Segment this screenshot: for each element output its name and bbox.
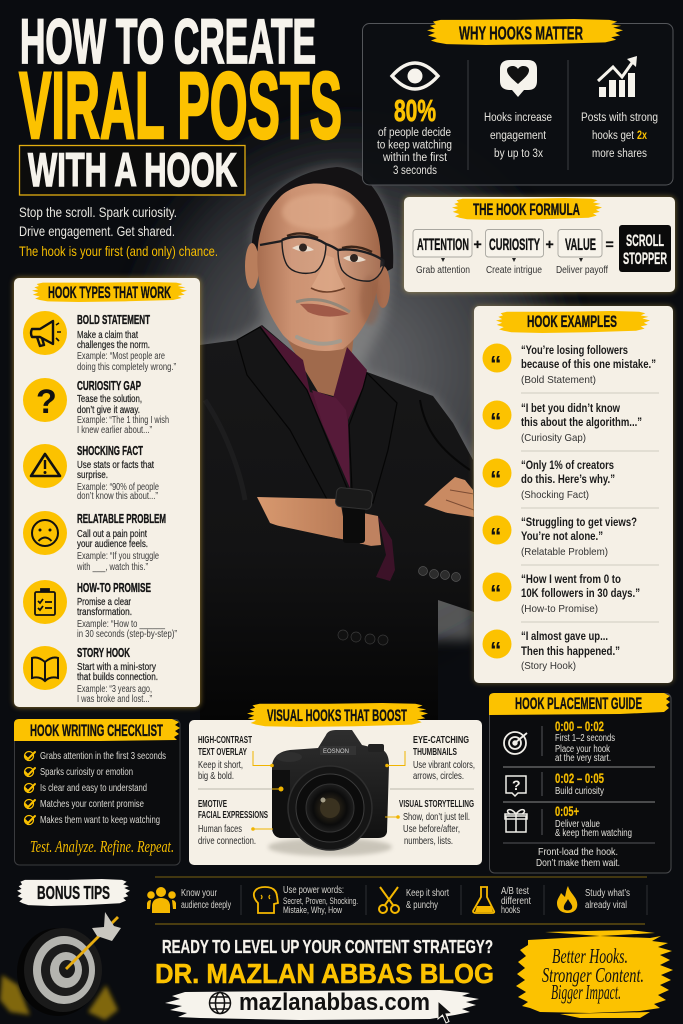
callout: emotive facial expressions: Human faces <box>198 823 242 835</box>
callout: emotive facial expressions <box>198 798 268 847</box>
panel: hook writing checklist <box>14 719 180 865</box>
text: engagement <box>484 112 552 160</box>
hook type: story hook: I was broke and lost...” <box>77 694 152 705</box>
buttons <box>418 566 460 582</box>
call to action: DR. MAZLAN ABBAS BLOG <box>155 958 494 989</box>
callout: eye-catching thumbnails: arrows, circles. <box>413 770 464 782</box>
step: deliver value: Deliver value <box>555 819 600 830</box>
portrait photo: man with glasses and arms crossed <box>200 167 474 720</box>
callout: emotive facial expressions: drive connection. <box>198 835 256 847</box>
formula terms: + <box>546 236 554 252</box>
tip: study viral <box>557 886 630 913</box>
step: first two seconds: First 1–2 seconds <box>555 733 615 744</box>
hook type: curiosity gap: Example: “The 1 thing I wish <box>77 415 169 426</box>
intro text: Drive engagement. Get shared. <box>19 223 175 239</box>
formula captions: Create intrigue <box>486 265 542 276</box>
tip: know your audience: Know your <box>181 888 218 899</box>
icon: question bubble <box>506 776 526 796</box>
goatee <box>297 337 340 344</box>
icon: open book <box>32 658 58 681</box>
hook type: bold statement: Make a claim that <box>77 330 138 341</box>
step: build curiosity: Build curiosity <box>555 786 604 797</box>
hook type: bold statement: doing this completely wrong.” <box>77 362 176 373</box>
intro text: The hook is your first (and only) chance. <box>19 243 218 259</box>
bonus tips strip <box>17 877 647 924</box>
stat: 80 percent: within the first <box>382 152 448 164</box>
formula terms: + <box>474 236 482 252</box>
checklist items: Makes them want to keep watching <box>40 814 160 826</box>
icon: sad face <box>32 520 58 546</box>
formula terms: CURIOSITY <box>489 235 540 254</box>
callout: high-contrast text overlay: big & bold. <box>198 770 234 782</box>
example: shocking fact: “ <box>490 466 502 492</box>
tip: keep it short: & punchy <box>406 900 438 911</box>
formula terms: VALUE <box>565 235 596 254</box>
glasses <box>260 237 384 281</box>
icon: growth chart <box>598 56 637 97</box>
step: deliver value: 0:05+ <box>555 803 579 819</box>
tip: keep it short <box>379 887 449 913</box>
example: curiosity gap: “I bet you didn’t know <box>521 403 620 415</box>
callout: visual storytelling: Use before/after, <box>403 823 460 835</box>
right hand fingers <box>424 477 474 524</box>
text: engagement: engagement <box>490 130 547 142</box>
icon: megaphone <box>31 321 61 346</box>
hook type: shocking fact: Use stats or facts that <box>77 460 154 471</box>
icon: gift box <box>505 810 527 832</box>
panel: hook types that work <box>14 278 200 707</box>
icon: dartboard with dart <box>0 912 121 1020</box>
bonus tips heading <box>17 879 130 906</box>
placement note: Don’t make them wait. <box>536 857 620 869</box>
hook type: curiosity gap: Tease the solution, <box>77 394 142 405</box>
checklist items <box>40 750 166 826</box>
checklist ticks <box>24 752 35 824</box>
example: bold statement: “ <box>490 351 502 377</box>
checklist items: Matches your content promise <box>40 798 144 810</box>
face <box>257 184 381 351</box>
icon: cursor <box>438 1001 452 1023</box>
watch <box>343 505 365 543</box>
icon: flame <box>557 886 577 913</box>
tip: power words <box>254 885 358 915</box>
panel: hook writing checklist: HOOK WRITING CHECKLIST <box>30 721 163 740</box>
title <box>19 7 342 196</box>
example: how-to promise: 10K followers in 30 days.” <box>521 588 640 600</box>
step: first two seconds: at the very start. <box>555 753 611 764</box>
hook type: bold statement <box>23 311 176 373</box>
icon: target <box>504 732 527 754</box>
website link: mazlanabbas.com <box>239 989 430 1016</box>
photo: dslr camera: EOSNON <box>323 749 349 755</box>
step: deliver value <box>555 803 632 839</box>
hook type: curiosity gap: don’t give it away. <box>77 405 140 416</box>
checklist slogan: Test. Analyze. Refine. Repeat. <box>30 837 174 856</box>
forehead light <box>282 194 354 230</box>
jacket <box>200 325 474 720</box>
hook type: shocking fact: don’t know this about...” <box>77 491 158 502</box>
hook type: how-to promise: HOW-TO PROMISE <box>77 580 151 595</box>
hook type: relatable problem: RELATABLE PROBLEM <box>77 511 166 526</box>
callout: eye-catching thumbnails: EYE-CATCHING <box>413 734 469 746</box>
example: bold statement: (Bold Statement) <box>521 374 596 386</box>
example: relatable problem: (Relatable Problem) <box>521 546 608 558</box>
tip: keep it short: Keep it short <box>406 888 449 899</box>
tip: study viral: Study what’s <box>585 888 630 899</box>
callout: yellow brush slogan: Bigger Impact. <box>551 980 621 1004</box>
example: how-to promise: “ <box>490 580 502 606</box>
tip: know your audience <box>147 887 231 913</box>
example: how-to promise: (How-to Promise) <box>521 603 598 615</box>
step: first two seconds: 0:00 – 0:02 <box>555 718 604 734</box>
text: shares: hooks get <box>592 130 635 142</box>
hook type: bold statement: Example: “Most people are <box>77 351 165 362</box>
example: shocking fact: (Shocking Fact) <box>521 489 589 501</box>
formula terms: = <box>606 236 614 252</box>
sleeve folds <box>205 400 245 500</box>
tip: know your audience: audience deeply <box>181 900 231 911</box>
panel: hook types that work: HOOK TYPES THAT WORK <box>48 283 171 302</box>
hook type: relatable problem: with ___, watch this.” <box>76 562 148 573</box>
with a hook box <box>20 143 245 196</box>
shirt <box>260 325 367 488</box>
icon: clipboard <box>35 589 55 615</box>
example: bold statement <box>482 344 656 386</box>
hook type: bold statement: BOLD STATEMENT <box>77 312 150 327</box>
example: curiosity gap: (Curiosity Gap) <box>521 432 586 444</box>
stat: 80 percent: of people decide <box>378 127 451 139</box>
callout: visual storytelling: Show, don’t just tell. <box>403 811 470 823</box>
icon: head <box>254 887 278 913</box>
example: relatable problem: “ <box>490 523 502 549</box>
call to action: READY TO LEVEL UP YOUR CONTENT STRATEGY? <box>162 936 493 957</box>
with a hook box: WITH A HOOK <box>28 143 237 196</box>
tip: power words: Use power words: <box>283 885 344 896</box>
lapels <box>237 327 347 505</box>
text: shares: 2x <box>637 130 647 142</box>
icon: globe <box>210 992 230 1014</box>
panel: hook examples <box>474 306 673 683</box>
hook type: shocking fact: Example: “90% of people <box>77 482 159 493</box>
tip: study viral: already viral <box>585 900 627 911</box>
hook type: story hook: that builds connection. <box>77 672 158 683</box>
checklist items: Is clear and easy to understand <box>40 782 147 794</box>
hook type: bold statement: challenges the norm. <box>77 340 150 351</box>
icon: question mark: ? <box>36 383 57 421</box>
hook type: shocking fact <box>23 443 159 502</box>
callout: high-contrast text overlay: Keep it short, <box>198 759 243 771</box>
hook type: how-to promise: in 30 seconds (step-by-step)” <box>77 629 177 640</box>
hook type: how-to promise: Example: “How to ______ <box>77 619 165 630</box>
call to action <box>155 936 494 1023</box>
example: relatable problem <box>482 516 637 558</box>
hair <box>252 167 393 275</box>
text: shares: more shares <box>592 148 647 160</box>
nose <box>311 255 345 292</box>
example: story hook <box>482 630 620 672</box>
panel: hook formula: THE HOOK FORMULA <box>473 200 580 219</box>
icon: heart bubble <box>500 60 537 97</box>
formula captions: Grab attention <box>416 265 470 276</box>
example: bold statement: “You’re losing followers <box>521 345 628 357</box>
photo: dslr camera <box>268 730 392 856</box>
example: shocking fact: “Only 1% of creators <box>521 460 614 472</box>
formula captions <box>416 265 608 276</box>
example: curiosity gap: “ <box>490 408 502 434</box>
example: relatable problem: “Struggling to get views? <box>521 517 637 529</box>
left forearm <box>257 497 347 540</box>
callout: high-contrast text overlay: HIGH-CONTRAST <box>198 734 252 746</box>
text: engagement: by up to 3x <box>494 148 543 160</box>
step: deliver value: & keep them watching <box>555 828 632 839</box>
tip: a/b test: A/B test <box>501 886 529 897</box>
hook type: story hook: Example: “3 years ago, <box>77 684 152 695</box>
hook type: curiosity gap <box>23 378 169 436</box>
callout: visual storytelling <box>399 798 474 847</box>
example: story hook: (Story Hook) <box>521 660 576 672</box>
neck <box>282 325 355 397</box>
hook type: shocking fact: SHOCKING FACT <box>77 443 143 458</box>
formula captions: Deliver payoff <box>556 265 608 276</box>
callout: yellow brush slogan: Better Hooks. <box>552 944 628 968</box>
hook type: story hook: Start with a mini-story <box>77 662 156 673</box>
hook type: relatable problem: your audience feels. <box>77 539 148 550</box>
example: relatable problem: You’re not alone.” <box>521 531 603 543</box>
callout leader lines <box>251 751 405 831</box>
callout: yellow brush slogan <box>516 930 673 1018</box>
step: first two seconds <box>555 718 615 764</box>
example: how-to promise <box>482 572 640 615</box>
hook type: curiosity gap: I knew earlier about...” <box>77 425 152 436</box>
icon: warning triangle <box>31 454 60 476</box>
title: VIRAL POSTS <box>19 53 342 159</box>
callout: high-contrast text overlay: TEXT OVERLAY <box>198 746 247 758</box>
icon: flask <box>473 887 494 913</box>
intro text <box>19 204 218 259</box>
eyes <box>292 245 314 252</box>
hook type: how-to promise: transformation. <box>77 607 132 618</box>
website link <box>165 989 479 1023</box>
panel: hook formula <box>404 197 675 292</box>
tip: a/b test: different <box>501 896 531 907</box>
example: story hook: Then this happened.” <box>521 646 620 658</box>
step: build curiosity: 0:02 – 0:05 <box>555 770 604 786</box>
panel: visual hooks that boost <box>189 703 482 865</box>
hook type: shocking fact: surprise. <box>77 470 108 481</box>
icon: question bubble: ? <box>512 777 521 793</box>
stat: 80 percent: 3 seconds <box>393 165 437 177</box>
example: how-to promise: “How I went from 0 to <box>521 574 621 586</box>
callout: visual storytelling: VISUAL STORYTELLING <box>399 798 474 810</box>
tip: power words: Mistake, Why, How <box>283 905 342 915</box>
example: story hook: “ <box>490 637 502 663</box>
hook type: story hook: STORY HOOK <box>77 645 130 660</box>
placement note <box>536 846 620 869</box>
formula terms: ATTENTION <box>417 235 469 254</box>
tip: power words: Secret, Proven, Shocking. <box>283 896 358 906</box>
icon: eye <box>392 63 438 89</box>
example: shocking fact: do this. Here’s why.” <box>521 474 615 486</box>
text: engagement: Hooks increase <box>484 112 552 124</box>
stat: 80 percent <box>377 93 452 177</box>
hook type: curiosity gap: CURIOSITY GAP <box>77 378 141 393</box>
stat: 80 percent: to keep watching <box>377 140 452 152</box>
hook type: how-to promise <box>23 580 177 640</box>
example: story hook: “I almost gave up... <box>521 631 608 643</box>
callout: eye-catching thumbnails <box>413 734 475 782</box>
hook type: how-to promise: Promise a clear <box>77 597 132 608</box>
hook type: relatable problem <box>23 511 166 573</box>
checklist items: Sparks curiosity or emotion <box>40 766 133 778</box>
text: shares <box>581 112 658 160</box>
text: shares: Posts with strong <box>581 112 658 124</box>
checklist items: Grabs attention in the first 3 seconds <box>40 750 166 762</box>
ears <box>245 243 259 289</box>
bonus tips heading: BONUS TIPS <box>37 883 110 903</box>
formula terms <box>417 235 614 262</box>
stat: 80 percent: 80% <box>394 93 436 128</box>
placement note: Front-load the hook. <box>538 846 618 858</box>
callout: emotive facial expressions: EMOTIVE <box>198 798 227 810</box>
callout: eye-catching thumbnails: THUMBNAILS <box>413 746 457 758</box>
moustache and mouth <box>296 300 350 312</box>
callout: visual storytelling: numbers, lists. <box>404 835 453 847</box>
scroll stopper box <box>619 225 671 272</box>
title: HOW TO CREATE <box>20 7 316 77</box>
tip: a/b test: hooks <box>501 905 520 916</box>
callout: high-contrast text overlay <box>198 734 252 782</box>
icon: scissors <box>379 887 399 913</box>
callout: eye-catching thumbnails: Use vibrant colors, <box>413 759 475 771</box>
example: curiosity gap <box>482 400 642 444</box>
panel: why hooks matter <box>362 19 673 185</box>
sleeves <box>376 502 474 612</box>
cuff <box>376 516 395 581</box>
panel: hook placement guide <box>489 693 671 873</box>
callout: emotive facial expressions: FACIAL EXPRESSIONS <box>198 809 268 821</box>
tip: a/b test <box>473 886 531 916</box>
panel: why hooks matter: WHY HOOKS MATTER <box>459 24 583 44</box>
example: curiosity gap: this about the algorithm...” <box>521 417 642 429</box>
halo <box>200 167 474 640</box>
icon: people <box>147 887 176 913</box>
panel: hook examples: HOOK EXAMPLES <box>527 312 617 331</box>
hook type: story hook <box>23 645 158 705</box>
example: bold statement: because of this one mistake.” <box>521 359 656 371</box>
hook type: relatable problem: Call out a pain point <box>77 529 147 540</box>
step: first two seconds: Place your hook <box>555 744 611 755</box>
step: build curiosity <box>555 770 604 797</box>
intro text: Stop the scroll. Spark curiosity. <box>19 204 177 220</box>
hook type: relatable problem: Example: “If you struggle <box>77 551 159 562</box>
cheek shade <box>360 275 380 325</box>
panel: visual hooks that boost: VISUAL HOOKS THAT BOOST <box>267 706 407 725</box>
example: shocking fact <box>482 458 615 501</box>
